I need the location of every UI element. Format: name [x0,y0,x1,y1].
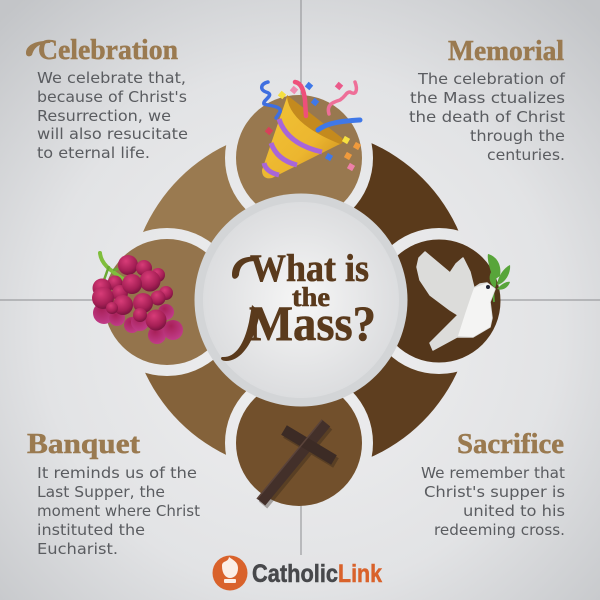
text: banquet body: moment where Christ [37,502,200,520]
text: banquet body: Last Supper, the [37,483,165,501]
text: banquet body: instituted the [37,521,145,539]
text: sacrifice body: Christ's supper is [424,483,565,501]
center title: What is the Mass?: What is [250,247,369,290]
icon: wooden cross [257,420,336,505]
panel: sacrifice [421,429,565,539]
circle: cross [236,380,362,506]
icon: grapes [92,253,183,344]
logo: CatholicLink: Catholic [252,560,338,588]
panel: celebration [26,35,188,162]
central disc [194,194,408,406]
center title: What is the Mass?: the [292,282,330,312]
heading: Banquet: Banquet [27,429,141,460]
text: banquet body: It reminds us of the [37,464,197,482]
icon: party popper [262,82,361,178]
panel: banquet [27,429,200,558]
text: banquet body: Eucharist. [37,540,118,558]
text: celebration body: to eternal life. [37,144,150,162]
text: memorial body: the death of Christ [409,108,565,126]
text: sacrifice body [421,464,565,539]
text: banquet body [37,464,200,558]
logo: CatholicLink: Link [338,560,382,588]
icon: dove [417,252,510,350]
text: sacrifice body: redeeming cross. [434,521,565,539]
text: celebration body: We celebrate that, [37,69,186,87]
text: memorial body: the Mass ctualizes [410,89,565,107]
circle: sacrifice dove [378,240,500,362]
text: celebration body [37,69,188,162]
center title: What is the Mass? [221,247,376,361]
text: memorial body: centuries. [487,146,565,164]
ring of four brown petals [143,143,458,457]
heading: Celebration: Celebration [38,35,178,66]
text: celebration body: Resurrection, we [37,107,171,125]
text: memorial body: The celebration of [417,70,566,88]
text: celebration body: will also resucitate [37,125,188,143]
text: memorial body [409,70,566,164]
circle: banquet grapes [104,239,230,365]
panel: memorial [409,36,566,164]
heading: Sacrifice: Sacrifice [457,429,564,460]
center title: What is the Mass?: Mass? [249,295,376,351]
heading: Memorial: Memorial [448,36,564,67]
text: celebration body: because of Christ's [37,88,187,106]
text: memorial body: through the [470,127,565,145]
text: sacrifice body: We remember that [421,464,565,482]
circle: celebration [236,95,362,221]
logo: CatholicLink [212,556,382,590]
text: sacrifice body: united to his [463,502,565,520]
